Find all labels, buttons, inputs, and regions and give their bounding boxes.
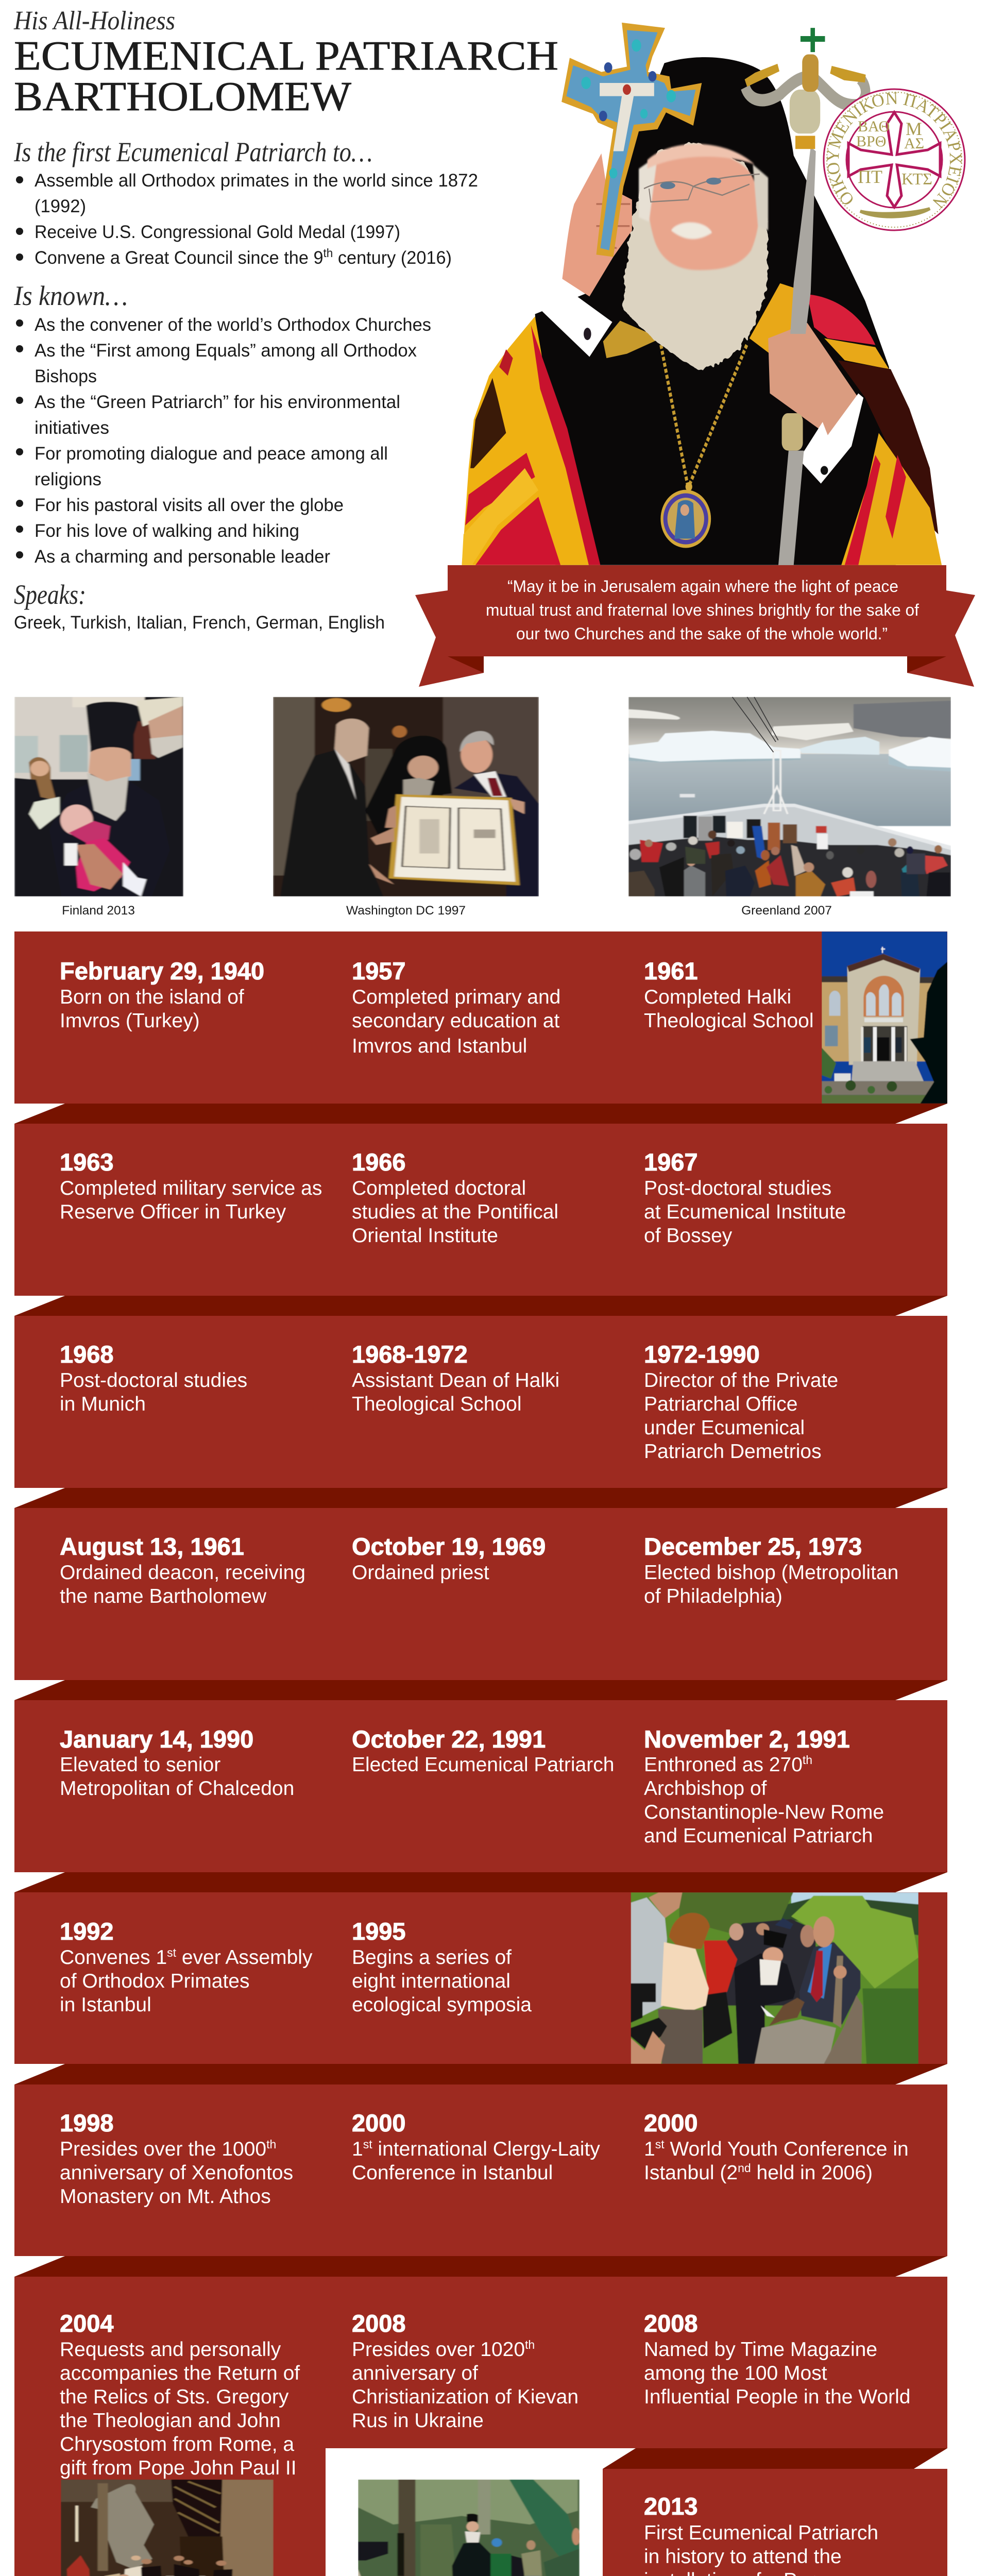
entry: 2000 World Youth: 2000 (644, 2109, 698, 2137)
seal letters: ΚΤΣ (901, 170, 932, 188)
entry: 1998: anniversary of Xenofontos (60, 2162, 293, 2184)
panel: 1963-1967 (14, 1124, 947, 1296)
bullet list: religions (35, 469, 101, 489)
entry: 2008 Kievan Rus: Rus in Ukraine (352, 2410, 484, 2432)
entry: October 19, 1969: Ordained priest (352, 1562, 489, 1584)
bullet list: Bishops (35, 366, 97, 386)
entry: 1998: Monastery on Mt. Athos (60, 2185, 271, 2208)
entry: November 2, 1991: and Ecumenical Patriarch (644, 1825, 873, 1847)
entry: 1961: Theological School (644, 1010, 814, 1032)
entry: 2000 Clergy-Laity: international Clergy-Laity (372, 2138, 600, 2160)
seal of the Ecumenical Patriarchate (823, 89, 965, 231)
entry: December 25, 1973: Elected bishop (Metropolitan (644, 1562, 898, 1584)
entry: 1967: Post-doctoral studies (644, 1177, 831, 1199)
languages list: Greek, Turkish, Italian, French, German, English (14, 613, 385, 633)
entry: August 13, 1961 (60, 1533, 305, 1607)
entry: 1966: studies at the Pontifical (352, 1201, 558, 1223)
bullet list (16, 315, 431, 567)
entry: 1967: at Ecumenical Institute (644, 1201, 846, 1223)
entry: 1992: st (167, 1946, 177, 1959)
entry: 1966: Oriental Institute (352, 1225, 498, 1247)
entry: November 2, 1991: Constantinople-New Rome (644, 1801, 884, 1823)
entry: December 25, 1973 (644, 1533, 898, 1607)
panel: 1998-2000 (14, 2084, 947, 2256)
quote ribbon (415, 565, 975, 687)
bullet list: For promoting dialogue and peace among all (35, 444, 388, 464)
entry: 2008 Kievan Rus: Presides over 1020 (352, 2338, 525, 2361)
entry: 2008 Kievan Rus: th (525, 2338, 535, 2351)
bullet list: th (324, 246, 333, 260)
entry: 1961 (644, 957, 814, 1032)
entry: 1957 (352, 957, 560, 1057)
entry: November 2, 1991: Archbishop of (644, 1777, 767, 1800)
entry: 1963: 1963 (60, 1148, 114, 1176)
entry: 1957: Completed primary and (352, 986, 560, 1008)
entry: 1992: in Istanbul (60, 1994, 151, 2016)
entry: 1968: 1968 (60, 1341, 114, 1368)
entry: 2008 Kievan Rus: 2008 (352, 2310, 406, 2337)
entry: 1957: 1957 (352, 957, 406, 985)
entry: August 13, 1961: August 13, 1961 (60, 1533, 244, 1560)
title line 1: ECUMENICAL PATRIARCH (14, 33, 558, 79)
entry: 1966 (352, 1148, 558, 1247)
bullet list: As a charming and personable leader (35, 547, 330, 567)
panel: 2004-2013 (14, 2277, 947, 2576)
entry: 1992: of Orthodox Primates (60, 1970, 249, 1992)
panel: 1968-1990 (14, 1316, 947, 1488)
photo: Halki Theological School (822, 931, 947, 1104)
photo: Patriarch releasing a hawk (631, 1892, 918, 2064)
entry: 2000 Clergy-Laity: 1 (352, 2138, 363, 2160)
bullet list: For his pastoral visits all over the globe (35, 495, 344, 515)
entry: December 25, 1973: December 25, 1973 (644, 1533, 862, 1560)
entry: 1968-1972: Theological School (352, 1393, 522, 1415)
entry: 2008 Kievan Rus (352, 2310, 578, 2432)
entry: 2013: 2013 (644, 2493, 698, 2520)
caption: Finland 2013: Finland 2013 (62, 904, 135, 918)
entry: 1968-1972 (352, 1341, 559, 1415)
bullet list: As the “Green Patriarch” for his environmental (35, 392, 400, 412)
entry: November 2, 1991 (644, 1725, 884, 1847)
entry: 2004: the Relics of Sts. Gregory (60, 2386, 289, 2408)
bullet list: As the “First among Equals” among all Orthodox (35, 341, 417, 361)
entry: 1995: eight international (352, 1970, 510, 1992)
entry: November 2, 1991: th (803, 1753, 812, 1767)
panel: 1992-1995 (14, 1892, 947, 2064)
subheading: Is known… (13, 280, 128, 311)
entry: 1968-1972: Assistant Dean of Halki (352, 1369, 559, 1392)
ribbon right tail (907, 590, 975, 687)
subheading: Is the first Ecumenical Patriarch to… (13, 137, 372, 167)
photo: Greenland 2007 (628, 697, 951, 896)
entry: 1992: Convenes 1 (60, 1946, 167, 1969)
bullet list: (1992) (35, 196, 86, 216)
entry: 1992: 1992 (60, 1918, 114, 1945)
entry: October 22, 1991: Elected Ecumenical Patriarch (352, 1754, 614, 1776)
entry: 2004: accompanies the Return of (60, 2362, 300, 2384)
entry: 1972-1990: 1972-1990 (644, 1341, 760, 1368)
entry: January 14, 1990: January 14, 1990 (60, 1725, 253, 1753)
entry: October 22, 1991: October 22, 1991 (352, 1725, 546, 1753)
entry: 2000 World Youth (644, 2109, 909, 2184)
entry: 2013: in history to attend the (644, 2546, 842, 2568)
seal letters: ΠΤ (858, 166, 882, 187)
entry: 2008 Time Magazine: Influential People in the World (644, 2386, 910, 2408)
entry: 1995 (352, 1918, 532, 2016)
bullet list: Receive U.S. Congressional Gold Medal (1997) (35, 222, 400, 242)
entry: February 29, 1940: February 29, 1940 (60, 957, 264, 985)
entry: 2000 World Youth: st (655, 2138, 665, 2151)
subheading: Speaks: (14, 579, 86, 610)
entry: 1972-1990 (644, 1341, 838, 1463)
entry: January 14, 1990 (60, 1725, 294, 1800)
entry: 1957: secondary education at (352, 1010, 559, 1032)
entry: 2004: 2004 (60, 2310, 114, 2337)
entry: October 19, 1969: October 19, 1969 (352, 1533, 546, 1560)
entry: December 25, 1973: of Philadelphia) (644, 1585, 782, 1607)
quote text: mutual trust and fraternal love shines brightly for the sake of (486, 601, 919, 619)
entry: 1998 (60, 2109, 293, 2208)
entry: 1963: Reserve Officer in Turkey (60, 1201, 286, 1223)
bullet list: As the convener of the world’s Orthodox Churches (35, 315, 431, 335)
entry: 2000 World Youth: held in 2006) (751, 2162, 873, 2184)
bullet list: century (2016) (333, 248, 452, 268)
entry: 1963: Completed military service as (60, 1177, 322, 1199)
panel: ordinations (14, 1508, 947, 1680)
entry: October 19, 1969 (352, 1533, 546, 1584)
photo: Washington DC 1997 (273, 697, 539, 896)
entry: January 14, 1990: Elevated to senior (60, 1754, 220, 1776)
entry: 1968-1972: 1968-1972 (352, 1341, 468, 1368)
seal letters: ΒΑΘ (858, 118, 890, 135)
entry: 1972-1990: Patriarch Demetrios (644, 1440, 822, 1463)
entry: 2008 Kievan Rus: anniversary of (352, 2362, 478, 2384)
entry: 2000 Clergy-Laity: 2000 (352, 2109, 406, 2137)
entry: 2008 Time Magazine (644, 2310, 910, 2408)
photo: St. Peter's Basilica ceremony (61, 2479, 274, 2576)
seal letters: Μ (906, 118, 922, 139)
entry: 2000 Clergy-Laity: st (363, 2138, 372, 2151)
caption: Washington DC 1997: Washington DC 1997 (346, 904, 466, 918)
entry: 2004 (60, 2310, 300, 2479)
seal letters (856, 118, 932, 188)
entry: 1967: 1967 (644, 1148, 698, 1176)
entry: 1972-1990: Patriarchal Office (644, 1393, 797, 1415)
bullet list: Assemble all Orthodox primates in the world since 1872 (35, 171, 478, 191)
photo: Finland 2013 (14, 697, 183, 896)
header: name and title (13, 6, 558, 120)
caption: Greenland 2007: Greenland 2007 (741, 904, 832, 918)
panel: 1940-1961 (14, 931, 947, 1104)
entry: 2008 Kievan Rus: Christianization of Kievan (352, 2386, 578, 2408)
entry: 2013 (644, 2493, 878, 2576)
quote text: our two Churches and the sake of the whole world.” (516, 624, 888, 643)
entry: 2000 Clergy-Laity: Conference in Istanbul (352, 2162, 553, 2184)
entry: 1972-1990: under Ecumenical (644, 1417, 805, 1439)
entry: 2000 World Youth: nd (738, 2161, 751, 2175)
entry: 1998: 1998 (60, 2109, 114, 2137)
timeline fold connectors, lower (14, 2064, 947, 2576)
entry: 1961: 1961 (644, 957, 698, 985)
entry: 1972-1990: Director of the Private (644, 1369, 838, 1392)
entry: 1967: of Bossey (644, 1225, 733, 1247)
panel: 2013 (603, 2469, 947, 2576)
bullet list: For his love of walking and hiking (35, 521, 299, 541)
bullet list: initiatives (35, 418, 109, 438)
portrait of the Patriarch (462, 23, 942, 565)
entry: 2008 Time Magazine: Named by Time Magazine (644, 2338, 877, 2361)
entry: 2004: Requests and personally (60, 2338, 281, 2361)
entry: November 2, 1991: November 2, 1991 (644, 1725, 850, 1753)
entry: August 13, 1961: Ordained deacon, receiving (60, 1562, 305, 1584)
entry: 1998: Presides over the 1000 (60, 2138, 266, 2160)
entry: 2004: gift from Pope John Paul II (60, 2457, 297, 2479)
entry: 1995: Begins a series of (352, 1946, 512, 1969)
entry: February 29, 1940: Born on the island of (60, 986, 244, 1008)
photo: Patriarch in the rainforest (358, 2479, 580, 2576)
panel: 1990-1991 (14, 1700, 947, 1872)
entry: 1995: 1995 (352, 1918, 406, 1945)
entry: 2004: the Theologian and John (60, 2410, 281, 2432)
entry: 1968: in Munich (60, 1393, 146, 1415)
entry: 1967 (644, 1148, 846, 1247)
entry: 1995: ecological symposia (352, 1994, 532, 2016)
entry: 1968: Post-doctoral studies (60, 1369, 247, 1392)
entry: November 2, 1991: Enthroned as 270 (644, 1754, 803, 1776)
entry: 1968 (60, 1341, 247, 1415)
timeline fold connectors, upper (14, 1104, 947, 1892)
seal circular inscription: ΟΙΚΟΥΜΕΝΙΚΟΝ ΠΑΤΡΙΑΡΧΕΙΟΝ (827, 93, 961, 209)
entry: February 29, 1940 (60, 957, 264, 1032)
entry: 2013: First Ecumenical Patriarch (644, 2522, 878, 2544)
entry: 2000 Clergy-Laity (352, 2109, 600, 2184)
entry: 1963 (60, 1148, 322, 1223)
ribbon left tail (415, 590, 484, 687)
seal letters: ΑΣ (904, 135, 924, 152)
text block: known for (13, 280, 431, 567)
entry: January 14, 1990: Metropolitan of Chalcedon (60, 1777, 294, 1800)
entry: 2008 Time Magazine: 2008 (644, 2310, 698, 2337)
text block: languages (14, 579, 385, 633)
entry: 1992: ever Assembly (176, 1946, 313, 1969)
seal laurel (860, 209, 930, 217)
quote text: “May it be in Jerusalem again where the light of peace (507, 577, 898, 596)
entry: 1957: Imvros and Istanbul (352, 1035, 527, 1057)
seal cross (848, 112, 940, 207)
text block: firsts (13, 137, 478, 268)
entry: October 22, 1991 (352, 1725, 614, 1776)
quote text (486, 577, 919, 643)
entry: 1966: Completed doctoral (352, 1177, 526, 1199)
entry: February 29, 1940: Imvros (Turkey) (60, 1010, 200, 1032)
entry: 2000 World Youth: Istanbul (2 (644, 2162, 738, 2184)
entry: August 13, 1961: the name Bartholomew (60, 1585, 267, 1607)
bullet list: Convene a Great Council since the 9 (35, 248, 329, 268)
entry: 1998: th (266, 2138, 276, 2151)
seal letters: ΒΡΘ (856, 133, 886, 150)
entry: 1992 (60, 1918, 313, 2016)
entry: 2000 World Youth: World Youth Conference in (665, 2138, 909, 2160)
entry: 1966: 1966 (352, 1148, 406, 1176)
entry: 2000 World Youth: 1 (644, 2138, 655, 2160)
entry: 1961: Completed Halki (644, 986, 791, 1008)
entry: 2008 Time Magazine: among the 100 Most (644, 2362, 827, 2384)
entry: 2004: Chrysostom from Rome, a (60, 2433, 294, 2455)
bullet list (16, 171, 478, 268)
honorific: His All-Holiness (13, 6, 175, 36)
title line 2: BARTHOLOMEW (14, 74, 352, 120)
